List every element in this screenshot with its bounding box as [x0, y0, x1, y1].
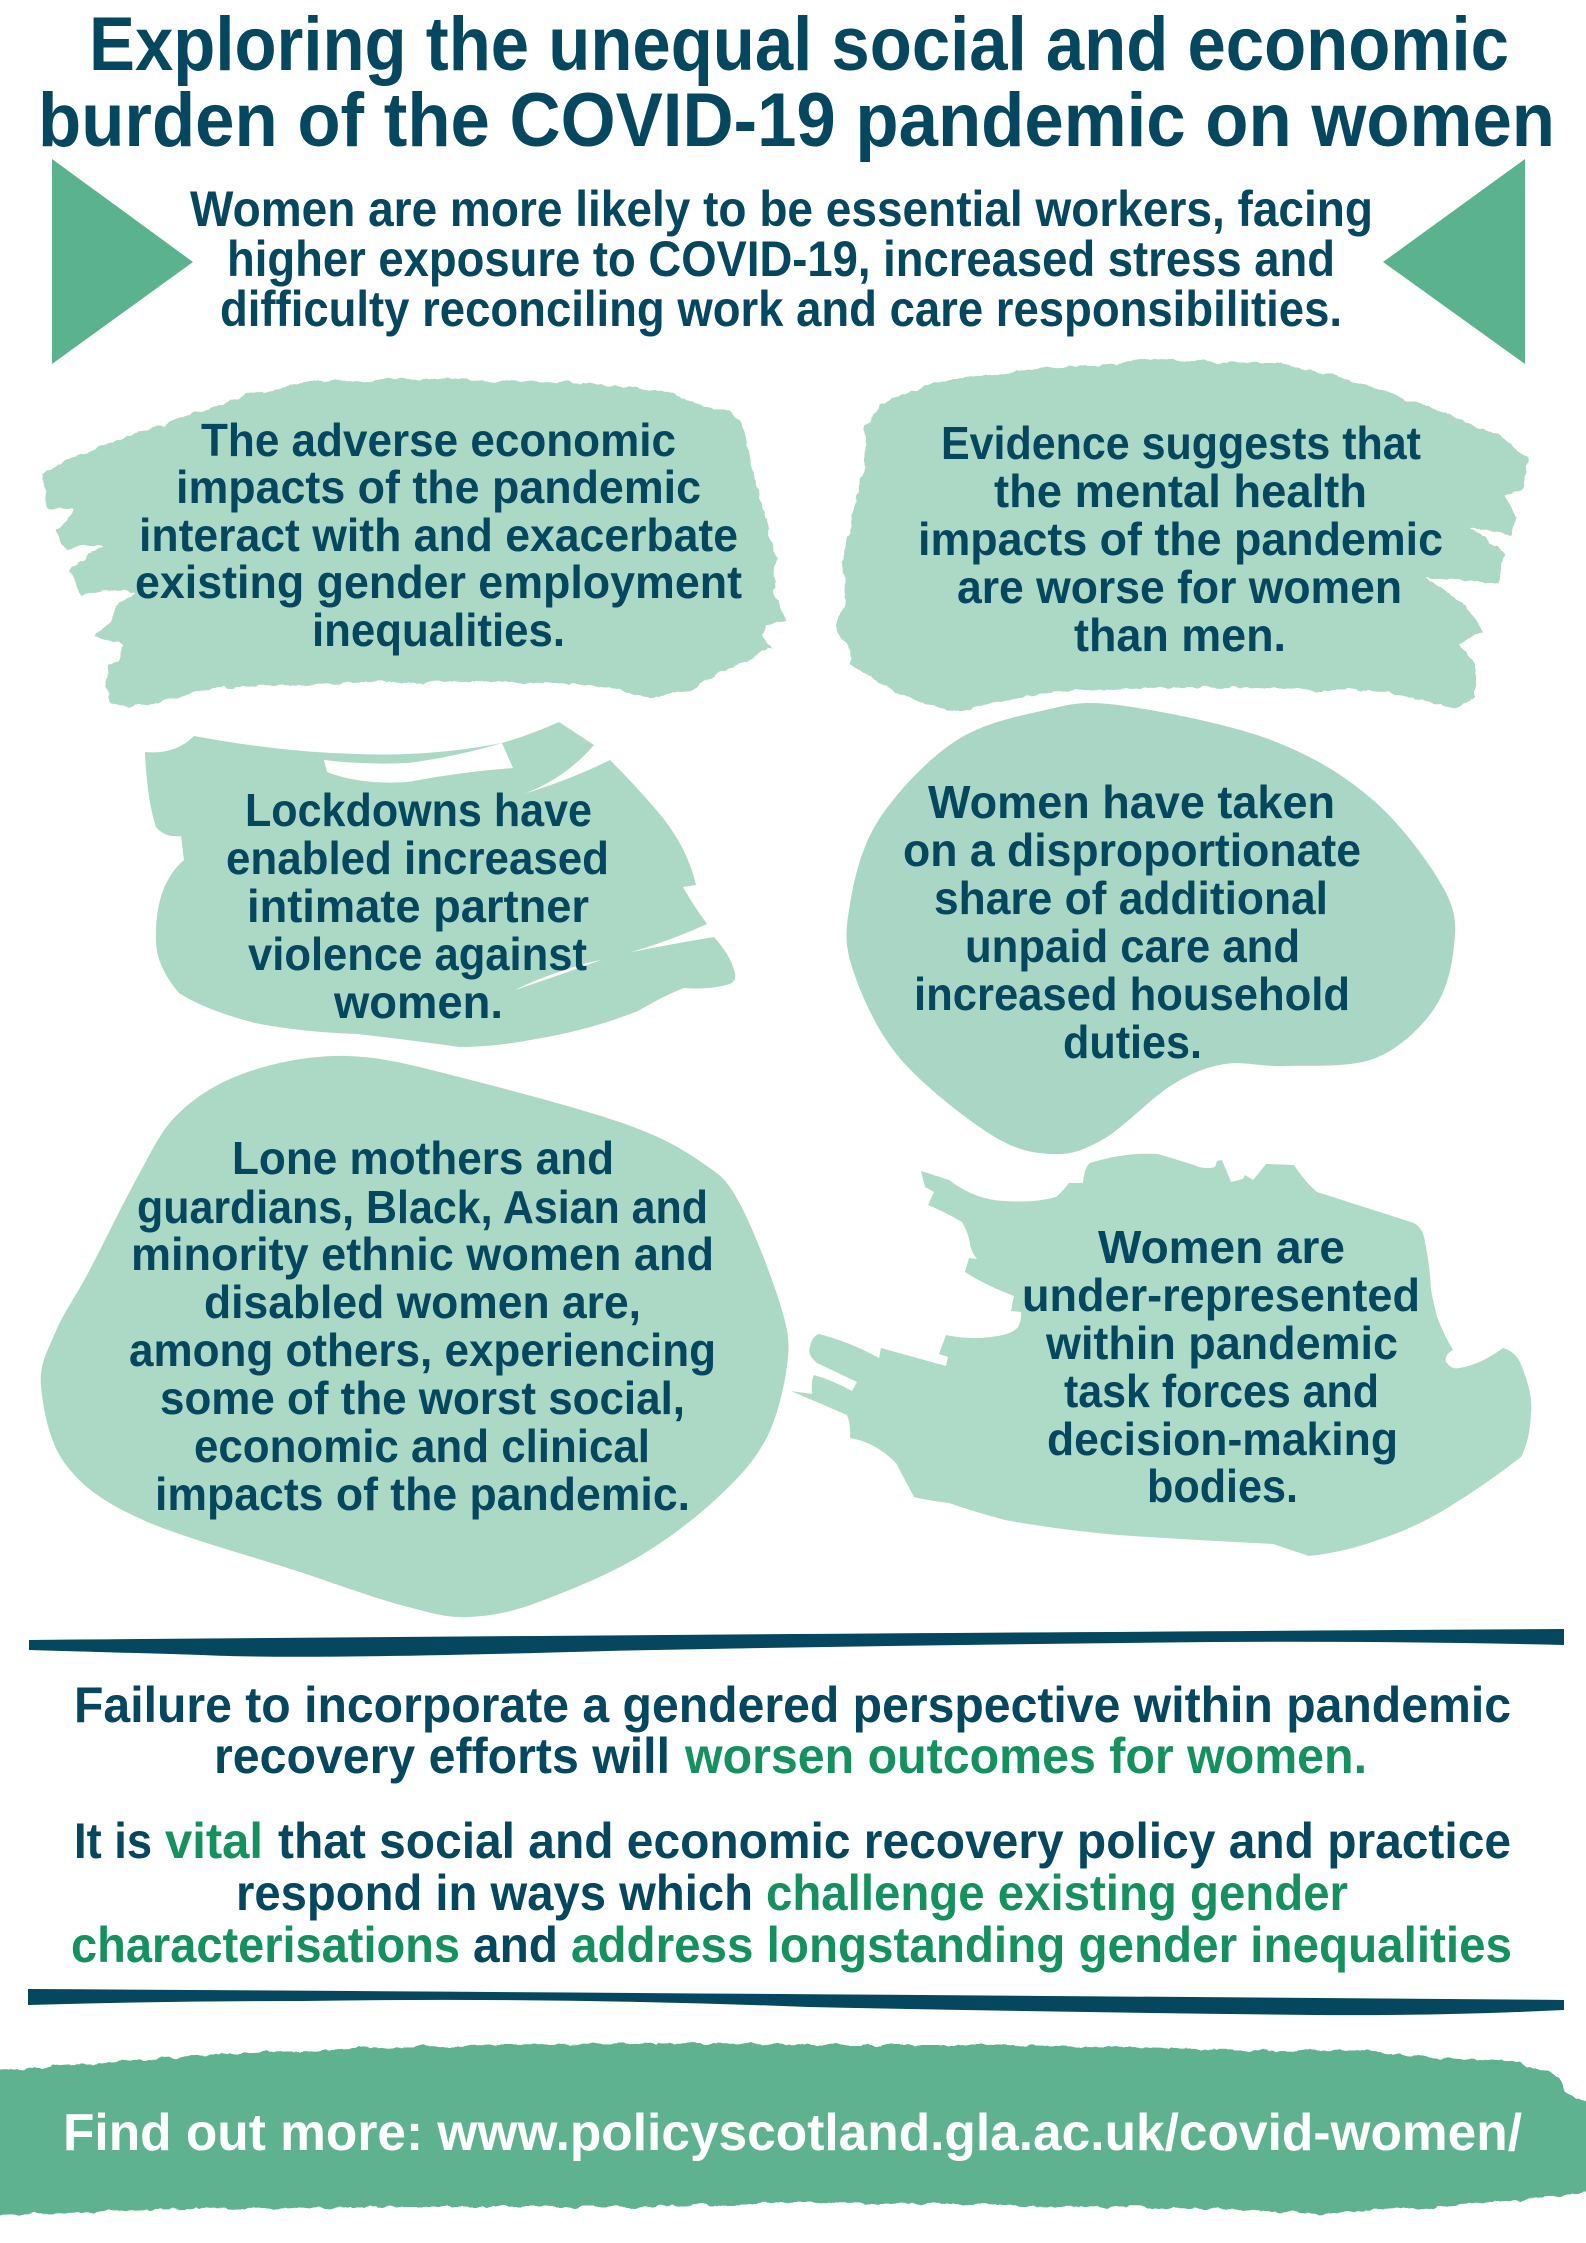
- text: economic impacts: impacts of the pandemic: [176, 461, 701, 513]
- conclusion: vital recovery response: address longstanding gender inequalities: [571, 1917, 1512, 1973]
- intro text: higher exposure to COVID-19, increased stress and: [227, 231, 1335, 287]
- intro text: difficulty reconciling work and care responsibilities.: [220, 281, 1342, 337]
- footer banner: [0, 2043, 1586, 2216]
- icon: right triangle: [1383, 159, 1525, 364]
- text: intimate partner violence: women.: [333, 976, 503, 1028]
- text: lone mothers and minority groups: minority ethnic women and: [131, 1228, 714, 1280]
- text: economic impacts: existing gender employment: [135, 556, 742, 608]
- text: intimate partner violence: enabled increased: [226, 832, 609, 884]
- text: under-representation: within pandemic: [1045, 1317, 1398, 1369]
- conclusion: vital recovery response: and: [473, 1917, 558, 1973]
- text: unpaid care: increased household: [914, 968, 1350, 1020]
- conclusion: vital recovery response: It is: [74, 1813, 152, 1869]
- text: mental health: impacts of the pandemic: [918, 513, 1443, 565]
- text: lone mothers and minority groups: disabled women are,: [204, 1276, 641, 1328]
- text: lone mothers and minority groups: among others, experiencing: [129, 1324, 716, 1376]
- text: lone mothers and minority groups: economic and clinical: [194, 1420, 650, 1472]
- text: mental health: Evidence suggests that: [941, 417, 1421, 469]
- text: intimate partner violence: Lockdowns have: [245, 784, 592, 836]
- intro text: Women are more likely to be essential workers, facing: [190, 181, 1373, 237]
- text: unpaid care: unpaid care and: [965, 920, 1300, 972]
- text: intimate partner violence: intimate partner: [247, 880, 589, 932]
- text: under-representation: Women are: [1098, 1221, 1345, 1273]
- title: [38, 2, 1555, 163]
- text: under-representation: decision-making: [1047, 1413, 1398, 1465]
- conclusion: failure to incorporate: worsen outcomes for women.: [684, 1728, 1367, 1784]
- conclusion: failure to incorporate: recovery efforts will: [214, 1728, 670, 1784]
- panel: lone mothers and minority groups: [41, 1056, 789, 1617]
- text: under-representation: task forces and: [1064, 1365, 1379, 1417]
- panel: unpaid care: [846, 703, 1455, 1154]
- text: unpaid care: duties.: [1063, 1016, 1202, 1068]
- text: unpaid care: [903, 776, 1361, 1068]
- text: under-representation: under-represented: [1022, 1269, 1420, 1321]
- text: unpaid care: share of additional: [934, 872, 1328, 924]
- text: mental health: the mental health: [994, 465, 1367, 517]
- text: lone mothers and minority groups: [129, 1132, 716, 1520]
- panel: economic impacts: [42, 378, 786, 708]
- text: lone mothers and minority groups: impacts of the pandemic.: [155, 1468, 690, 1520]
- conclusion: vital recovery response: respond in ways which: [236, 1865, 753, 1921]
- panel: under-representation: [791, 1154, 1531, 1556]
- text: under-representation: [1022, 1221, 1420, 1512]
- text: lone mothers and minority groups: guardians, Black, Asian and: [137, 1181, 708, 1233]
- conclusion: vital recovery response: challenge existing gender: [766, 1865, 1348, 1921]
- panel: intimate partner violence: [145, 722, 735, 1047]
- text: intimate partner violence: [226, 784, 609, 1028]
- conclusion: failure to incorporate: [74, 1677, 1511, 1784]
- text: lone mothers and minority groups: some of the worst social,: [160, 1372, 685, 1424]
- text: economic impacts: The adverse economic: [201, 414, 676, 466]
- text: intimate partner violence: violence against: [248, 928, 587, 980]
- panel: mental health: [834, 359, 1528, 711]
- intro panel: [52, 159, 1525, 364]
- text: lone mothers and minority groups: Lone mothers and: [232, 1132, 614, 1184]
- icon: left triangle: [52, 159, 193, 364]
- text: mental health: are worse for women: [957, 561, 1402, 613]
- text: under-representation: bodies.: [1147, 1460, 1298, 1512]
- text: mental health: than men.: [1074, 609, 1286, 661]
- conclusion: vital recovery response: [71, 1813, 1512, 1973]
- footer link text: Find out more: www.policyscotland.gla.ac.uk/covid-women/: [63, 2104, 1522, 2162]
- conclusion: vital recovery response: that social and economic recovery policy and practice: [278, 1813, 1511, 1869]
- text: economic impacts: interact with and exacerbate: [139, 509, 738, 561]
- text: unpaid care: on a disproportionate: [903, 824, 1361, 876]
- text: economic impacts: inequalities.: [312, 604, 565, 656]
- text: economic impacts: [135, 414, 742, 656]
- conclusion: vital recovery response: characterisations: [71, 1917, 460, 1973]
- text: mental health: [918, 417, 1443, 661]
- text: unpaid care: Women have taken: [928, 776, 1335, 828]
- conclusion: failure to incorporate: Failure to incorporate a gendered perspective within pandemic: [74, 1677, 1511, 1733]
- conclusion: vital recovery response: vital: [165, 1813, 263, 1869]
- intro text: [190, 181, 1373, 337]
